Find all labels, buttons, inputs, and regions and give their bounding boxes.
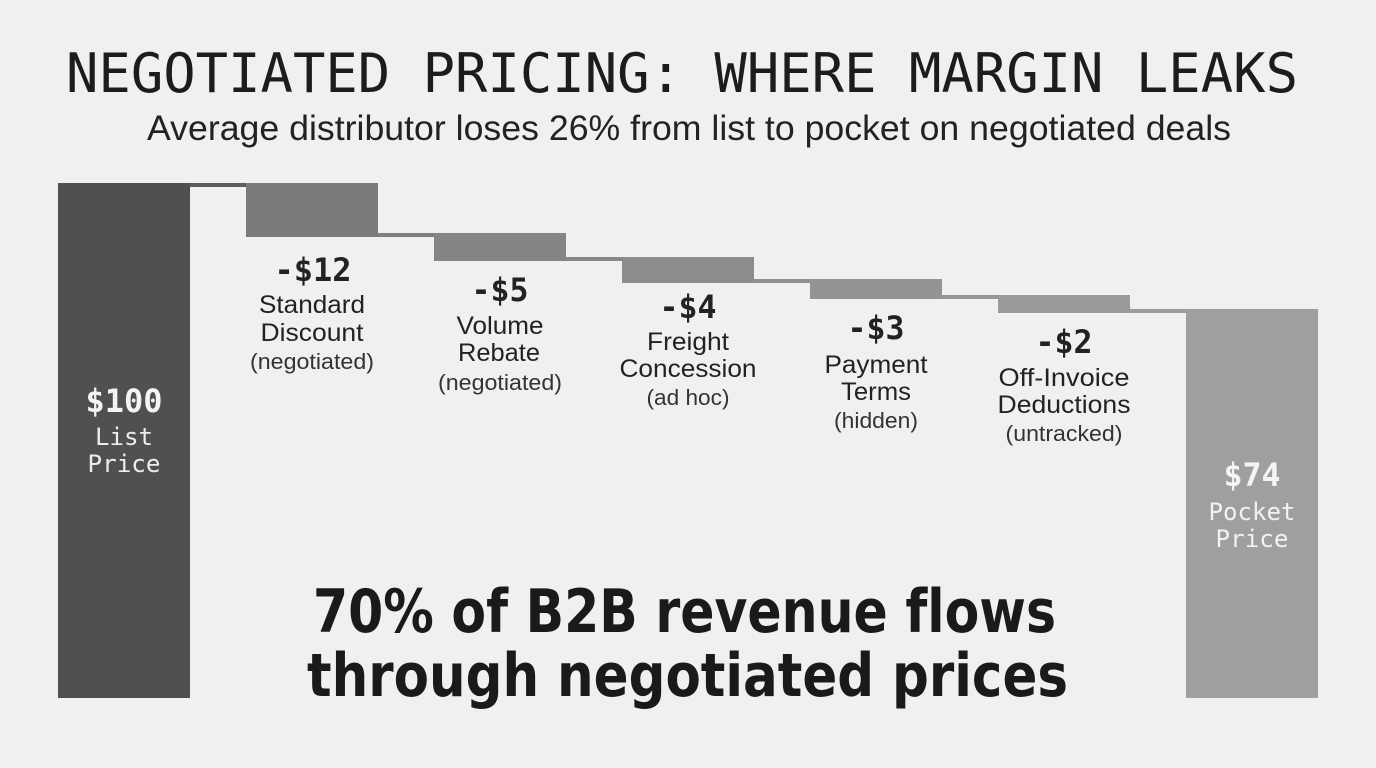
callout: 70% of B2B revenue: 70% of B2B revenue flows (313, 577, 1056, 647)
waterfall chart (58, 183, 1318, 698)
callout: 70% of B2B revenue: through negotiated prices (307, 641, 1068, 711)
callout: 70% of B2B revenue (307, 577, 1068, 711)
step: off-invoice deductions: Off-Invoice (998, 364, 1130, 392)
step: off-invoice deductions (998, 295, 1130, 446)
step: volume rebate: (negotiated) (438, 370, 562, 395)
bar: list price: List (95, 423, 153, 451)
step: freight concession: Freight (647, 328, 729, 356)
step: payment terms: Payment (824, 351, 928, 379)
step: standard discount (246, 183, 378, 374)
step: freight concession: (ad hoc) (646, 385, 730, 410)
bar: pocket price (1186, 309, 1318, 698)
bar: list price (58, 183, 190, 698)
step: payment terms: Terms (841, 378, 911, 406)
step: volume rebate: -$5 (472, 271, 528, 309)
step: standard discount: Discount (260, 319, 364, 347)
bar: list price: $100 (86, 382, 162, 420)
step: standard discount: (negotiated) (250, 349, 374, 374)
step: off-invoice deductions: Deductions (998, 391, 1130, 419)
step: standard discount: -$12 (274, 251, 352, 289)
step: payment terms: (hidden) (834, 408, 918, 433)
step: off-invoice deductions: (untracked) (1006, 421, 1122, 446)
connector (942, 295, 998, 299)
connector (190, 183, 246, 187)
bar: pocket price: $74 (1224, 456, 1280, 494)
step: freight concession (620, 257, 756, 410)
step: volume rebate (434, 233, 566, 395)
title: NEGOTIATED PRICING: WHERE MARGIN LEAKS (66, 42, 1298, 105)
step: volume rebate: Rebate (458, 339, 540, 367)
step: payment terms (810, 279, 942, 433)
step: payment terms: -$3 (848, 309, 904, 347)
connector (754, 279, 810, 283)
bar: pocket price: Price (1216, 525, 1288, 553)
step: off-invoice deductions: -$2 (1036, 323, 1092, 361)
subtitle: Average distributor loses 26% from list to pocket on negotiated deals (147, 109, 1231, 148)
step: volume rebate: Volume (456, 312, 544, 340)
step: freight concession: Concession (620, 355, 756, 383)
step: standard discount: Standard (259, 291, 365, 319)
step: freight concession: -$4 (660, 288, 716, 326)
bar: list price: Price (88, 450, 160, 478)
bar: pocket price: Pocket (1208, 498, 1296, 526)
connector (1130, 309, 1186, 313)
connector (378, 233, 434, 237)
connector (566, 257, 622, 261)
